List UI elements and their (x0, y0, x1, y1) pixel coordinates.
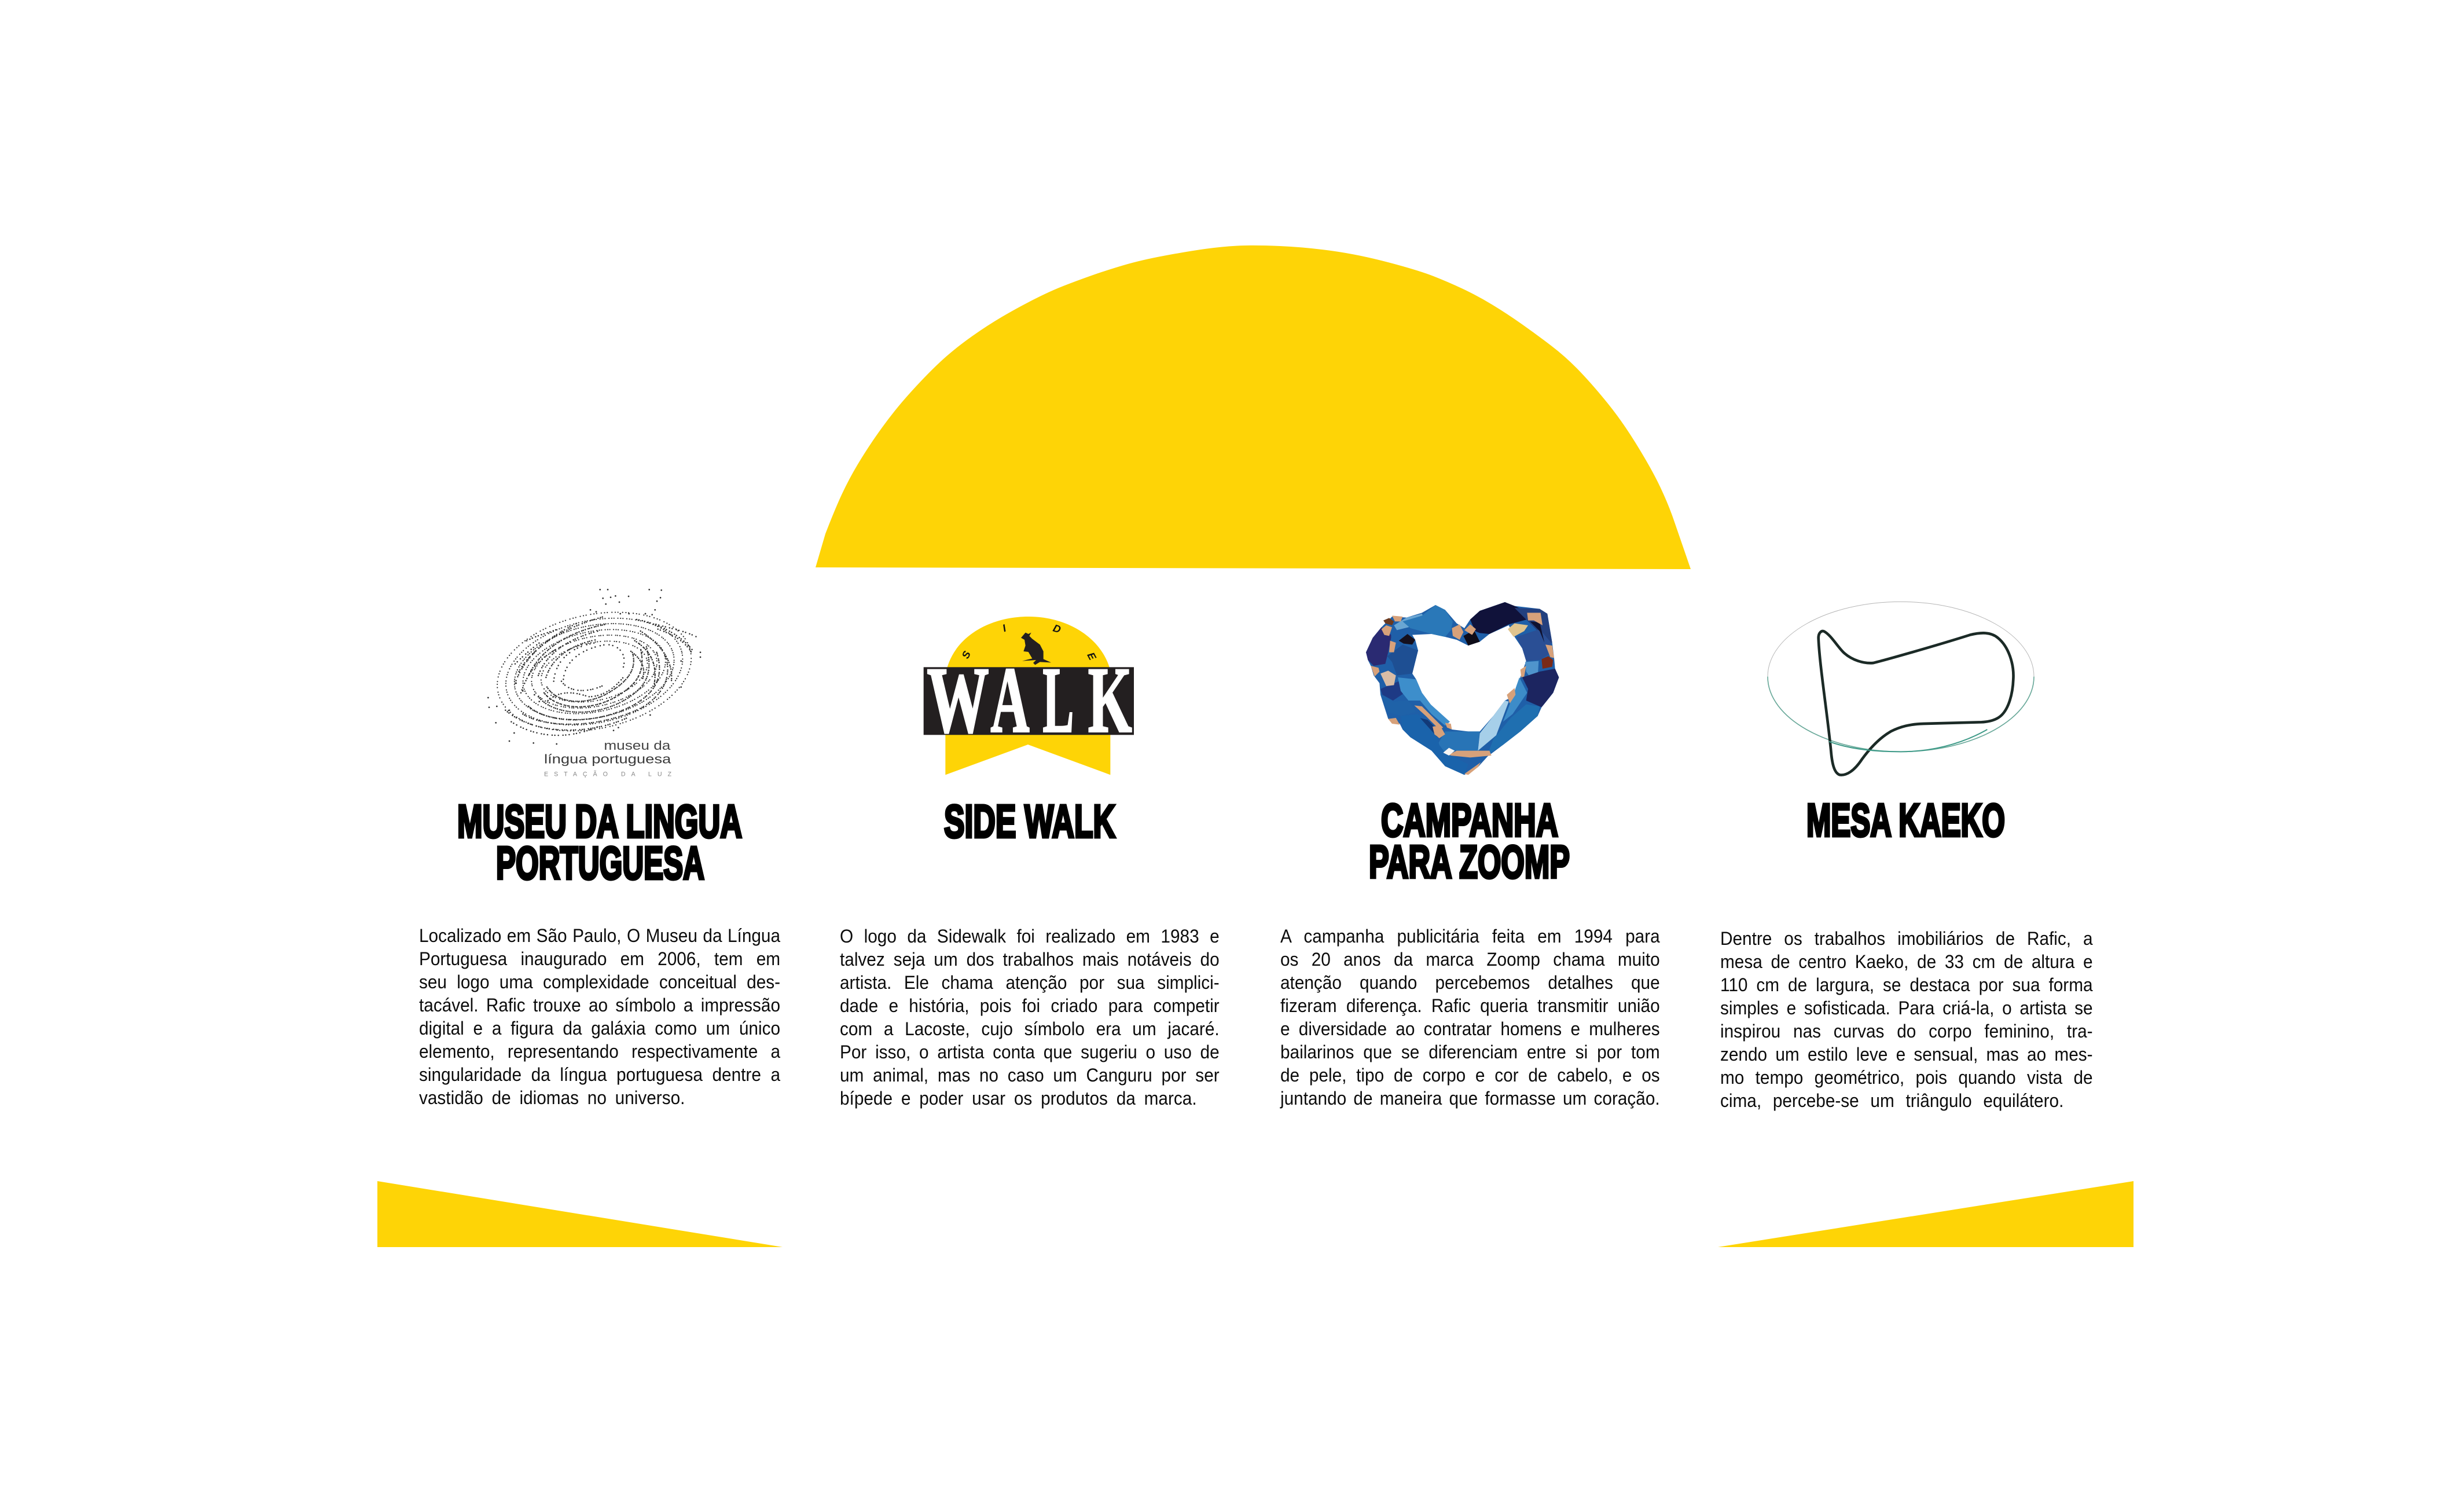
navy body, right (1516, 629, 1551, 661)
navy jacket, top centre (1470, 602, 1527, 634)
dark shadow, lower left (1420, 718, 1440, 737)
text block: Mesa Kaeko: cima, percebe-se um triângulo equilátero. (1720, 1090, 2063, 1111)
arc letters: S (960, 649, 973, 661)
title: Museu da Língua Portuguesa: PORTUGUESA (496, 837, 704, 889)
jeans leg, right (1503, 677, 1527, 722)
icon: fingerprint galaxy (486, 589, 702, 748)
text block: Side Walk: talvez seja um dos trabalhos mais notáveis do (840, 949, 1220, 970)
text block: Museu da Língua Portuguesa: seu logo uma complexidade conceitual des- (419, 972, 780, 992)
text block: Mesa Kaeko: inspirou nas curvas do corpo feminino, tra- (1720, 1021, 2093, 1042)
yellow corner wedge right (1718, 1181, 2133, 1247)
lower dense arcs (547, 654, 634, 701)
woman torso, bottom (1437, 731, 1480, 753)
wordmark: L (1042, 648, 1074, 753)
photo: heart of dancers (1366, 602, 1559, 775)
wordmark: K (1088, 648, 1132, 753)
icon: kangaroo (1021, 633, 1051, 665)
wordmark: W (927, 648, 989, 753)
text block: Mesa Kaeko: simples e sofisticada. Para criá-la, o artista se (1720, 998, 2093, 1018)
navy sleeve, mid left (1380, 681, 1409, 701)
scattered dots (488, 589, 700, 744)
text block: Campanha para Zoomp: A campanha publicitária feita em 1994 para (1280, 926, 1660, 947)
bald head (1380, 670, 1396, 686)
glass edge front (1829, 729, 1987, 752)
logo: Museu da Língua Portuguesa (486, 589, 702, 778)
text block: Side Walk: Por isso, o artista conta que sugeriu o uso de (840, 1042, 1220, 1062)
text block: Mesa Kaeko: Dentre os trabalhos imobiliários de Rafic, a (1720, 928, 2093, 949)
jeans, mid left (1398, 677, 1450, 725)
text block: Museu da Língua Portuguesa (419, 925, 780, 1108)
title: Campanha para Zoomp: CAMPANHA (1381, 794, 1558, 846)
wordmark: A (990, 648, 1030, 753)
text block: Museu da Língua Portuguesa: Localizado em São Paulo, O Museu da Língua (419, 925, 780, 946)
logo: Museu da Língua Portuguesa: ESTAÇÃO DA LUZ (544, 771, 671, 778)
yellow dome (816, 245, 1691, 569)
title: Museu da Língua Portuguesa (457, 796, 742, 889)
text block: Mesa Kaeko: mesa de centro Kaeko, de 33 cm de altura e (1720, 951, 2093, 972)
wire frame (1819, 631, 2014, 775)
brown hair (1383, 618, 1394, 625)
wordmark (927, 648, 1132, 753)
glass top upper rim (1768, 602, 2034, 677)
text block: Side Walk: um animal, mas no caso um Canguru por ser (840, 1065, 1220, 1086)
black band (924, 667, 1134, 735)
navy sleeve, top right (1515, 608, 1552, 644)
dark hair (1463, 630, 1480, 646)
text block: Campanha para Zoomp: de pele, tipo de corpo e cor de cabelo, e os (1280, 1065, 1660, 1086)
text block: Side Walk (840, 926, 1220, 1109)
arc letters: E (1085, 650, 1099, 662)
arc letters: I (1001, 622, 1008, 634)
text block: Side Walk: O logo da Sidewalk foi realizado em 1983 e (840, 926, 1220, 947)
photo: Kaeko table (1768, 602, 2034, 775)
dark hollow (1530, 621, 1544, 643)
heart base band (1366, 602, 1559, 775)
upper left arcs (546, 640, 596, 677)
title: Side Walk: SIDE WALK (944, 796, 1115, 847)
title: Campanha para Zoomp (1369, 794, 1570, 888)
yellow corner wedge left (377, 1181, 783, 1247)
denim person, lower left (1401, 714, 1468, 775)
logo: Museu da Língua Portuguesa: língua portuguesa (544, 752, 671, 766)
glass top lower rim (1768, 677, 2034, 752)
text block: Mesa Kaeko: 110 cm de largura, se destaca por sua forma (1720, 974, 2093, 995)
text block: Side Walk: com a Lacoste, cujo símbolo era um jacaré. (840, 1018, 1220, 1039)
text block: Mesa Kaeko: mo tempo geométrico, pois quando vista de (1720, 1067, 2093, 1088)
text block: Campanha para Zoomp: os 20 anos da marca Zoomp chama muito (1280, 949, 1660, 970)
skin: faces, arms, feet (1371, 613, 1554, 775)
text block: Mesa Kaeko (1720, 928, 2093, 1111)
sparse filler rings (486, 595, 702, 748)
denim body, mid left (1382, 695, 1416, 716)
text block: Museu da Língua Portuguesa: tacável. Rafic trouxe ao símbolo a impressão (419, 995, 780, 1016)
text block: Campanha para Zoomp (1280, 926, 1660, 1109)
denim legs, lower right (1488, 705, 1540, 754)
text block: Side Walk: bípede e poder usar os produtos da marca. (840, 1088, 1197, 1109)
text block: Campanha para Zoomp: e diversidade ao contratar homens e mulheres (1280, 1018, 1660, 1039)
text block: Museu da Língua Portuguesa: digital e a figura da galáxia como um único (419, 1018, 780, 1039)
brown face (1541, 656, 1553, 669)
text block: Campanha para Zoomp: juntando de maneira que formasse um coração. (1280, 1088, 1660, 1109)
text block: Mesa Kaeko: zendo um estilo leve e sensual, mas ao mes- (1720, 1044, 2093, 1065)
title: Campanha para Zoomp: PARA ZOOMP (1369, 836, 1570, 888)
text block: Campanha para Zoomp: fizeram diferença. Rafic queria transmitir união (1280, 995, 1660, 1016)
text block: Side Walk: dade e história, pois foi criado para competir (840, 995, 1220, 1016)
dark denim jacket, upper left (1366, 627, 1391, 666)
upper right arcs (631, 651, 644, 679)
pale lower legs (1478, 701, 1509, 751)
logo text: museu da (604, 738, 671, 753)
text block: Campanha para Zoomp: bailarinos que se diferenciam entre si por tom (1280, 1042, 1660, 1062)
text block: Museu da Língua Portuguesa: singularidade da língua portuguesa dentre a (419, 1064, 780, 1085)
text block: Campanha para Zoomp: atenção quando percebemos detalhes que (1280, 972, 1660, 993)
navy jacket, right (1522, 669, 1559, 707)
light jeans, right (1525, 661, 1538, 681)
inner sparse rings (563, 644, 624, 679)
text block: Museu da Língua Portuguesa: vastidão de idiomas no universo. (419, 1087, 685, 1108)
text block: Side Walk: artista. Ele chama atenção por sua simplici- (840, 972, 1220, 993)
yellow badge (945, 617, 1110, 775)
arc letters (960, 622, 1099, 662)
white shirt (1443, 748, 1455, 756)
text block: Museu da Língua Portuguesa: Portuguesa inaugurado em 2006, tem em (419, 948, 780, 969)
logo: Side Walk (924, 617, 1134, 775)
arc letters: D (1052, 622, 1062, 636)
blond head (1508, 624, 1528, 637)
title: Museu da Língua Portuguesa: MUSEU DA LINGUA (457, 796, 742, 847)
title: Mesa Kaeko: MESA KAEKO (1806, 794, 2005, 846)
text block: Museu da Língua Portuguesa: elemento, representando respectivamente a (419, 1041, 780, 1062)
denim torso, top left (1402, 605, 1453, 637)
light jeans, top left (1394, 614, 1426, 630)
denim jacket, mid left (1387, 644, 1418, 676)
